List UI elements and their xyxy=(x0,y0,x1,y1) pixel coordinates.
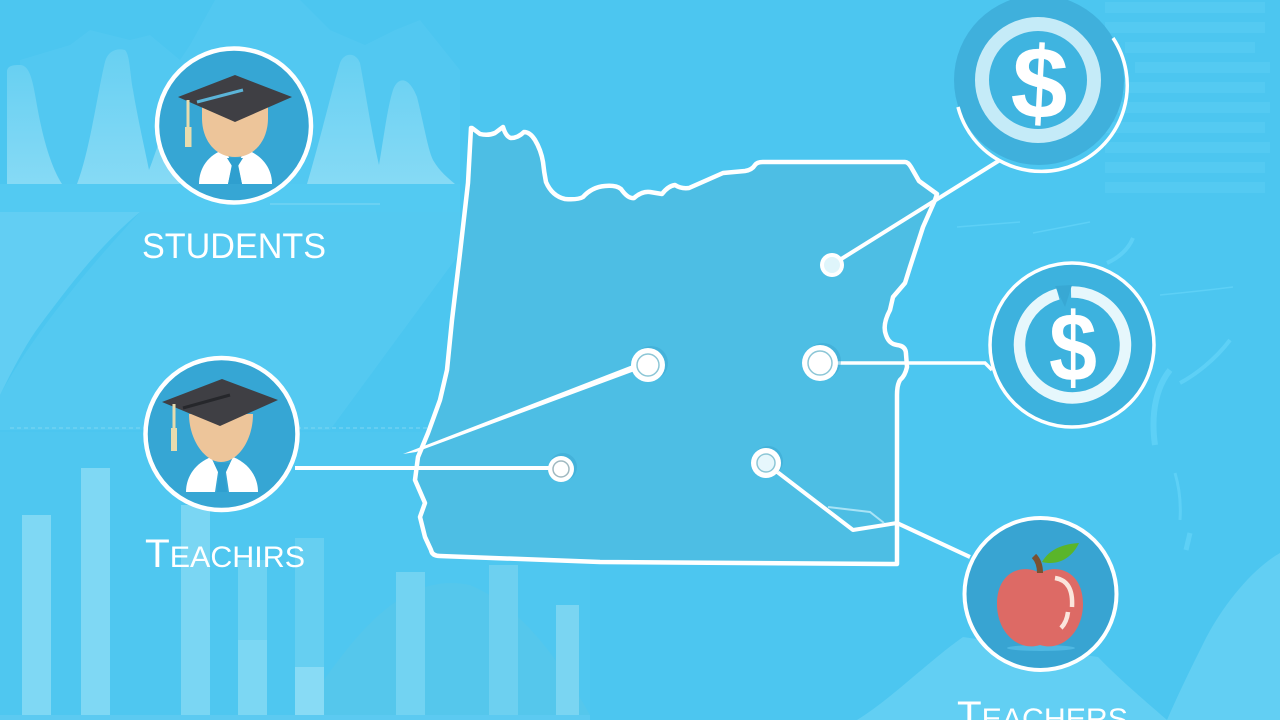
label: teachers misspelled: TEACHIRS xyxy=(145,532,305,576)
map marker: southwest xyxy=(548,453,577,482)
state map outline xyxy=(415,127,937,564)
map marker: center xyxy=(631,346,668,382)
label: students: STUDENTS xyxy=(142,227,326,266)
icon: teacher graduate xyxy=(146,358,298,510)
icon: dollar middle right xyxy=(990,263,1154,427)
bar chart xyxy=(22,468,579,715)
map marker: southeast xyxy=(751,446,783,478)
icon: student graduate xyxy=(157,48,311,202)
map marker: east xyxy=(802,343,841,381)
map marker: northeast xyxy=(820,253,844,277)
icon: dollar middle right: $ xyxy=(1049,293,1097,402)
icon: dollar top right: $ xyxy=(1009,25,1071,141)
connector lines xyxy=(295,160,1000,557)
icon: dollar top right xyxy=(954,0,1127,171)
icon: apple xyxy=(964,518,1116,670)
